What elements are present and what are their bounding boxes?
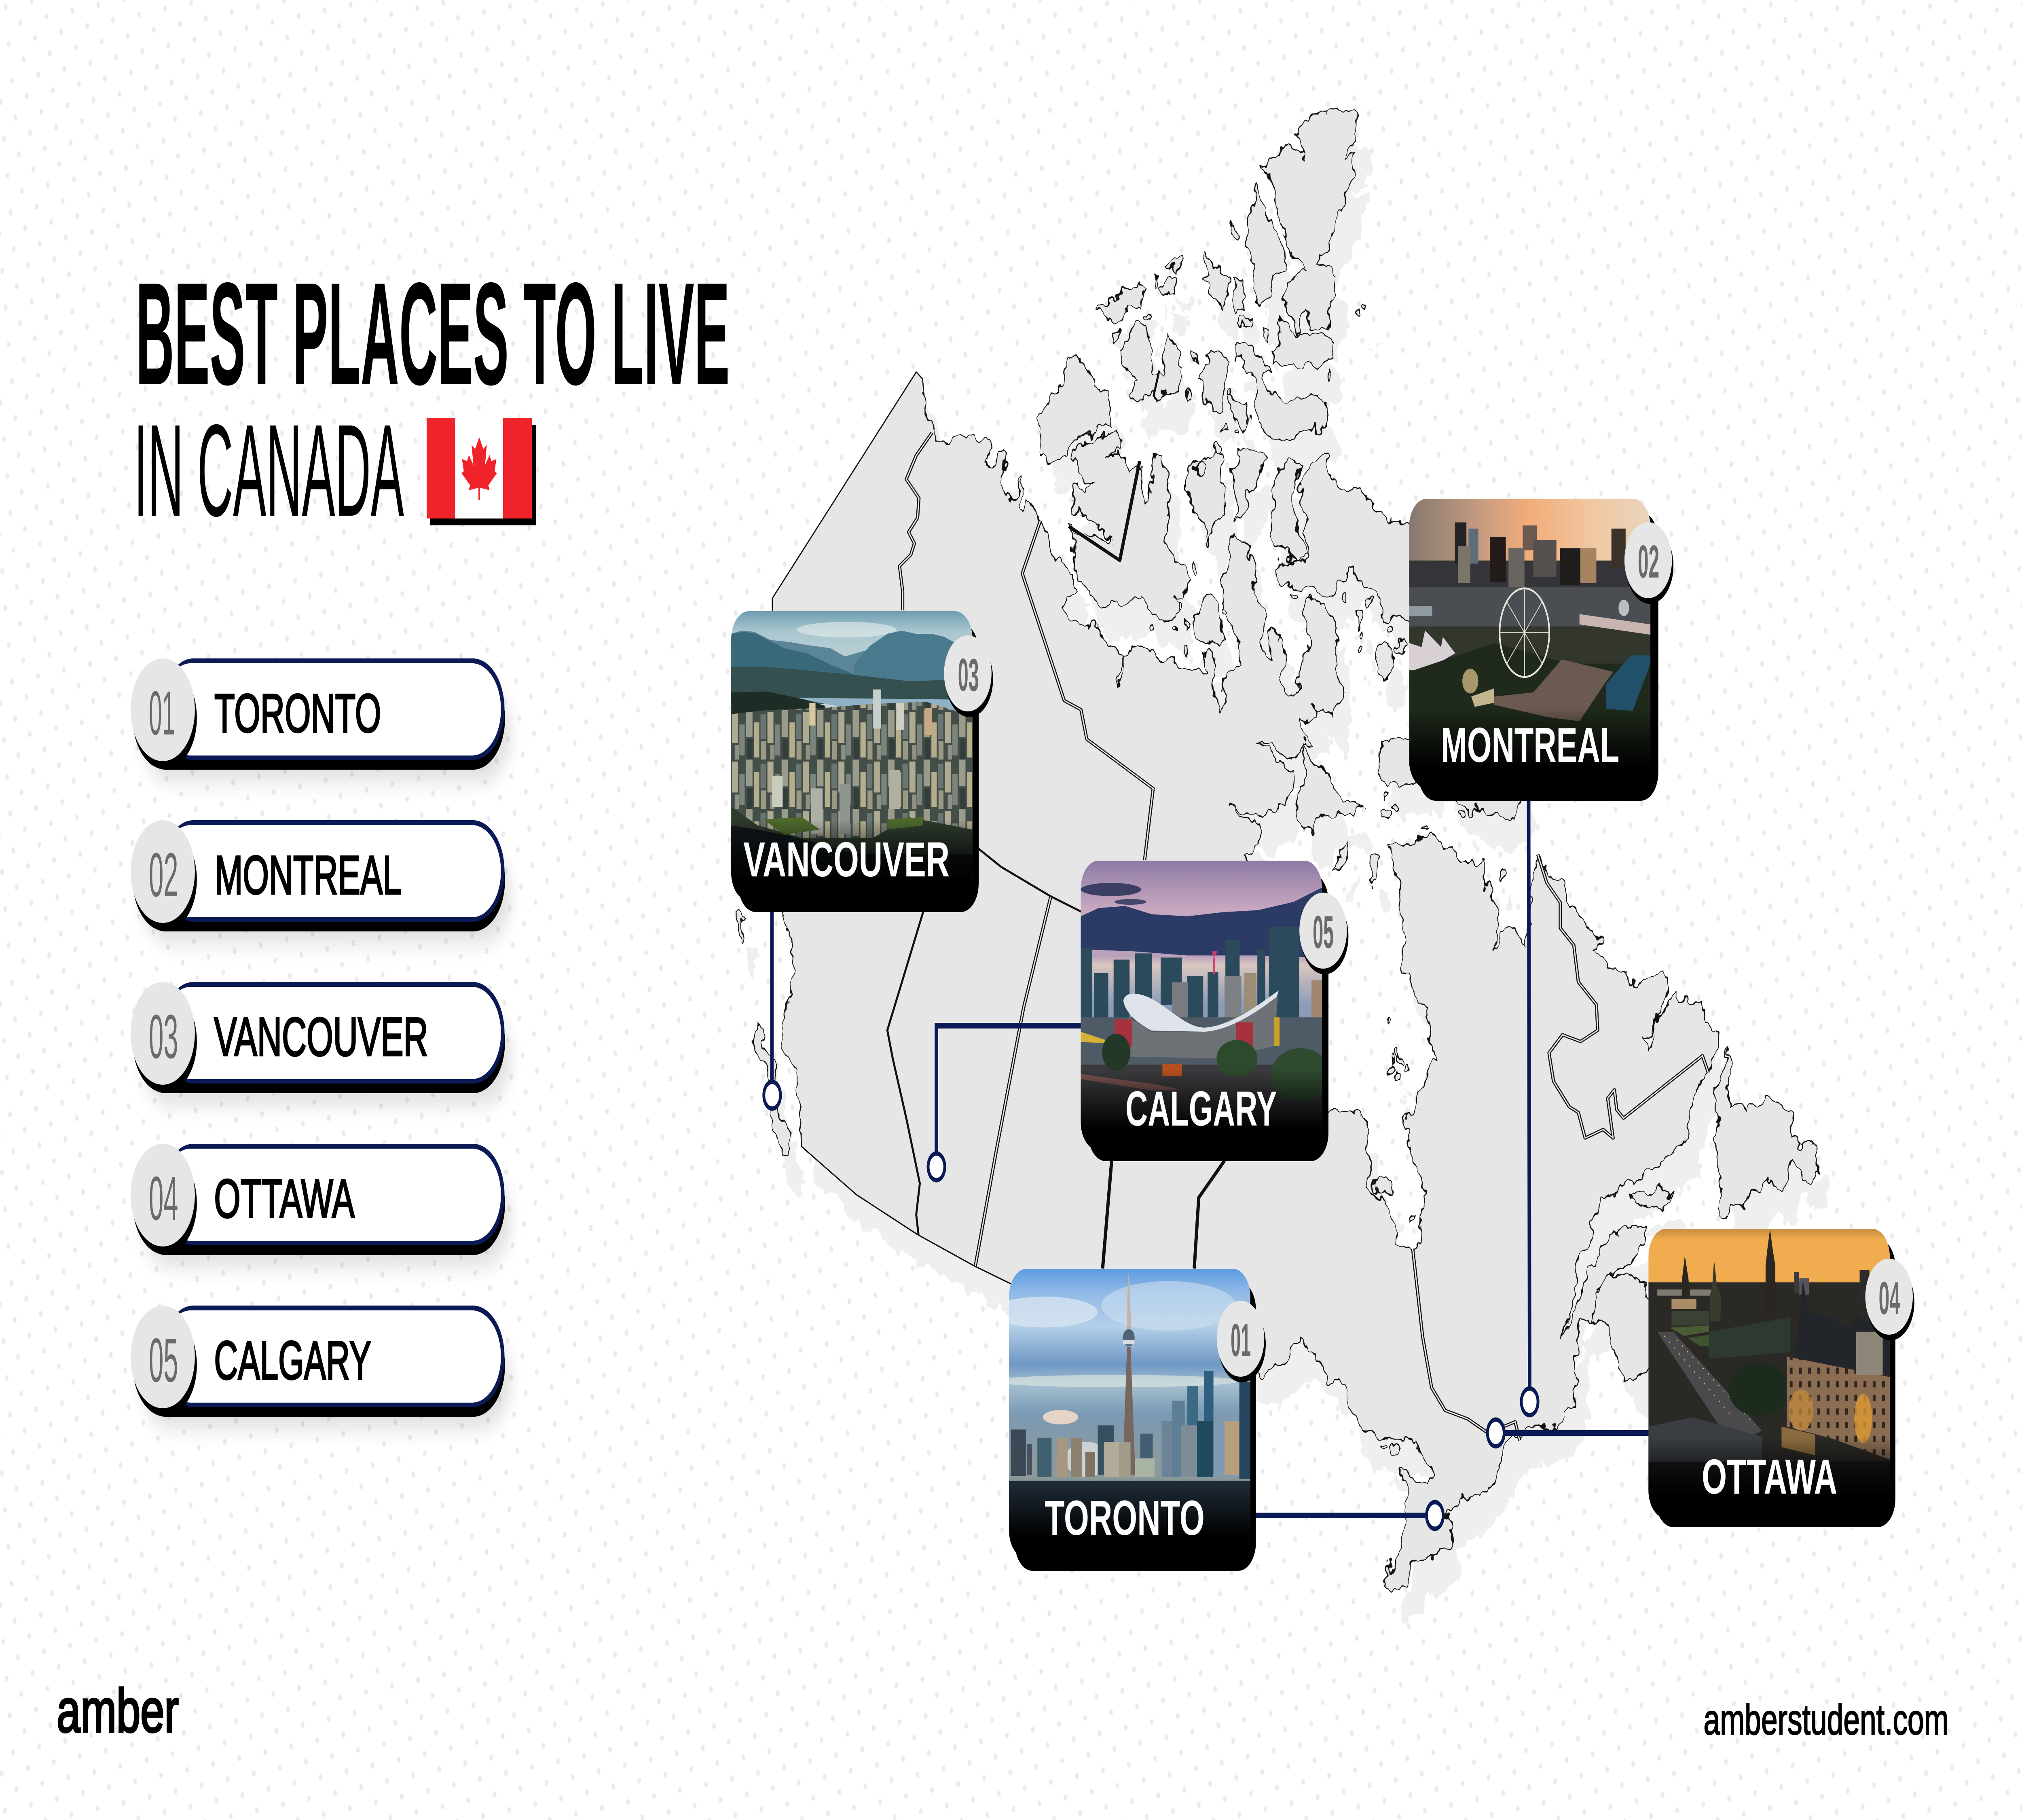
connector lines and location dots <box>764 799 1650 1529</box>
pill 05 Calgary: CALGARY <box>214 1330 371 1391</box>
badge 04 <box>1865 1259 1914 1340</box>
badge 04: 04 <box>1879 1273 1900 1324</box>
card: Montreal <box>1409 499 1673 801</box>
badge 05 <box>1299 893 1348 974</box>
connector: Ottawa <box>1504 1430 1650 1436</box>
title line 2: IN CANADA <box>134 397 404 544</box>
pill 01 Toronto: TORONTO <box>214 683 381 744</box>
badge 01 <box>1217 1301 1266 1382</box>
provincial borders <box>887 371 1708 1441</box>
logo: amber: amber <box>57 1676 179 1745</box>
badge 05: 05 <box>1313 907 1334 958</box>
dot: Toronto <box>1427 1502 1443 1529</box>
pill 05 Calgary <box>131 1306 510 1428</box>
pill 01 Toronto: 01 <box>149 679 175 748</box>
dot: Montreal <box>1521 1388 1538 1415</box>
pill 02 Montreal <box>131 820 510 942</box>
connector: Calgary <box>937 1026 1082 1153</box>
badge 03: 03 <box>958 650 979 701</box>
label: Ottawa: OTTAWA <box>1702 1449 1837 1504</box>
connector: Vancouver <box>769 906 775 1082</box>
dot: Vancouver <box>764 1082 780 1109</box>
badge 01: 01 <box>1231 1315 1251 1366</box>
card: Calgary <box>1081 861 1348 1161</box>
card: Ottawa <box>1648 1229 1914 1527</box>
title line 1: BEST PLACES TO LIVE <box>136 252 730 415</box>
map of Canada <box>737 106 1828 1625</box>
pill 03 Vancouver <box>131 982 510 1104</box>
photo: Ottawa Parliament <box>1648 1229 1890 1518</box>
title <box>134 252 730 544</box>
pill 05 Calgary: 05 <box>149 1326 178 1395</box>
card: Vancouver <box>731 611 993 912</box>
pill 02 Montreal: 02 <box>149 840 178 910</box>
card: Toronto <box>991 1269 1266 1571</box>
photo: Montreal Old Port <box>1409 499 1650 788</box>
photo: Calgary Saddledome <box>1081 861 1331 1150</box>
photo: Toronto CN Tower <box>991 1269 1250 1558</box>
dot: Ottawa <box>1487 1420 1504 1446</box>
photo: Vancouver skyline <box>731 611 973 901</box>
connector: Toronto <box>1254 1513 1427 1518</box>
label: Toronto: TORONTO <box>1045 1490 1205 1545</box>
pill 02 Montreal: MONTREAL <box>215 844 401 906</box>
label: Montreal: MONTREAL <box>1441 717 1619 772</box>
badge 02: 02 <box>1638 536 1659 588</box>
land masses with organic coastline <box>737 106 1816 1591</box>
website: amberstudent.com <box>1704 1695 1949 1744</box>
icon: Canadian flag <box>427 418 536 525</box>
map drop shadow <box>749 141 1828 1625</box>
pill 03 Vancouver: VANCOUVER <box>214 1006 428 1067</box>
pill 04 Ottawa: OTTAWA <box>214 1168 355 1229</box>
badge 02 <box>1624 522 1673 604</box>
pill 03 Vancouver: 03 <box>149 1002 178 1072</box>
badge 03 <box>944 635 993 717</box>
label: Calgary: CALGARY <box>1125 1081 1277 1136</box>
pill 04 Ottawa <box>131 1144 510 1266</box>
dot: Calgary <box>928 1153 945 1180</box>
pill 01 Toronto <box>131 658 510 781</box>
ranking list <box>131 658 510 1428</box>
pill 04 Ottawa: 04 <box>149 1164 178 1234</box>
straight land borders <box>772 371 1016 1285</box>
label: Vancouver: VANCOUVER <box>743 832 950 887</box>
